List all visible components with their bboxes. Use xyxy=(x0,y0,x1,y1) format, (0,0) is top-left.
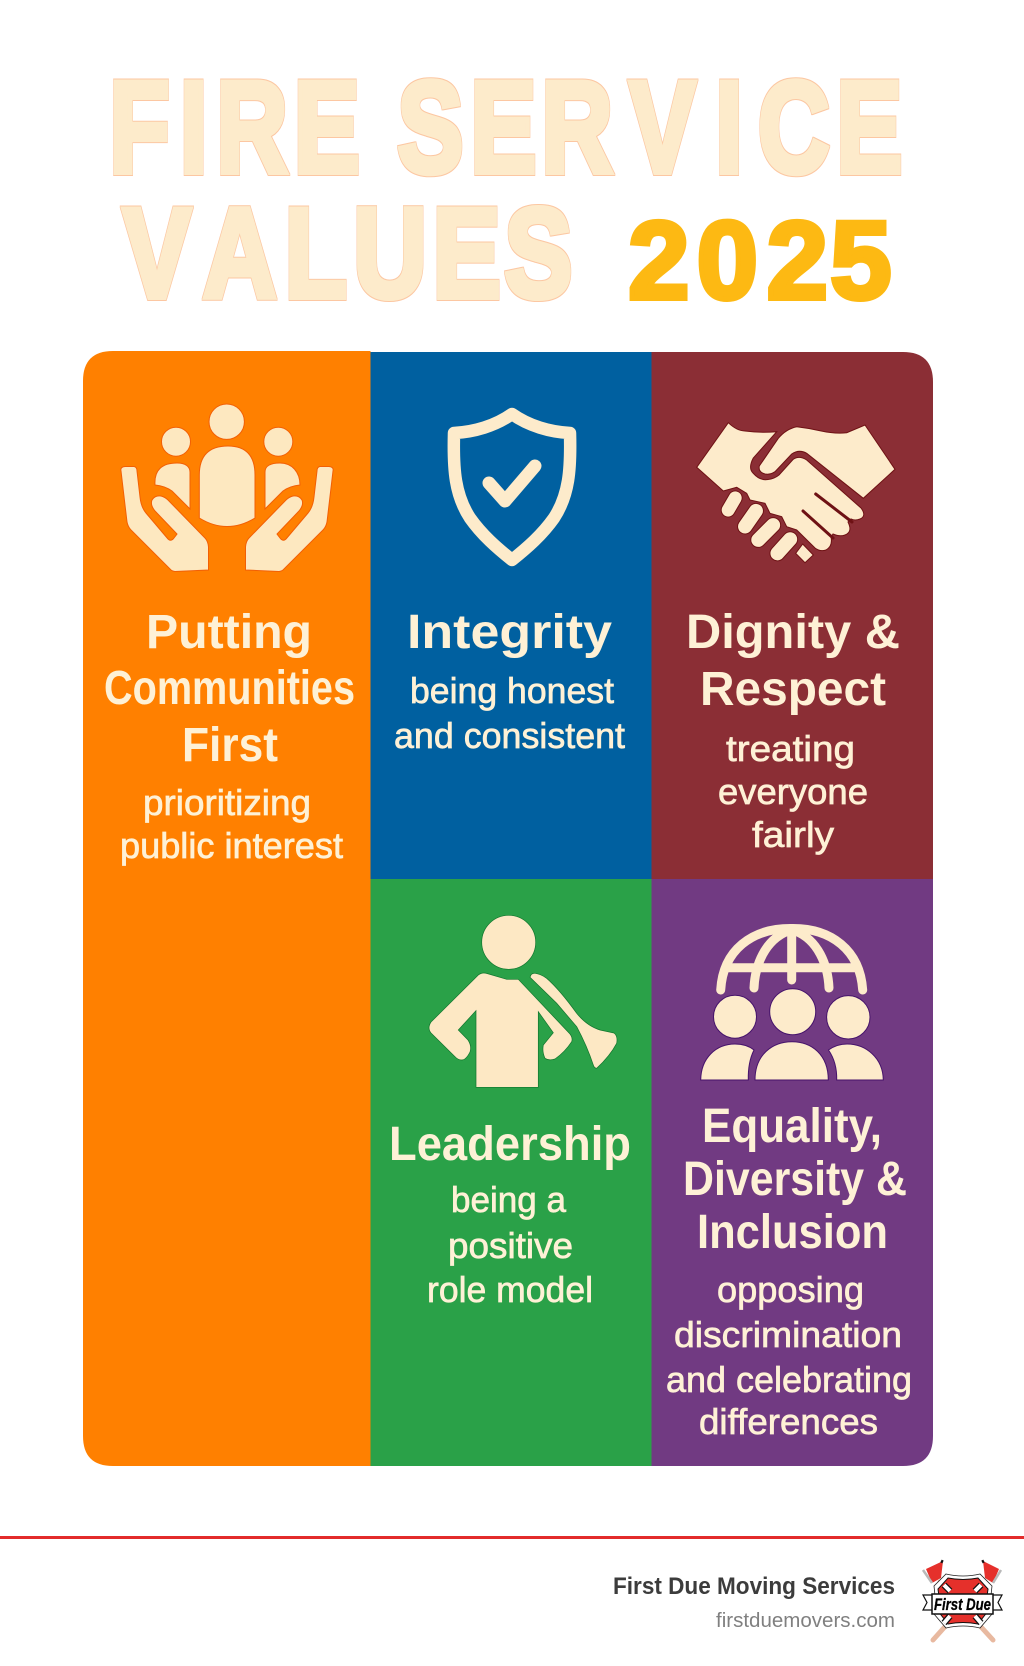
heading: Integrity xyxy=(407,606,612,659)
description xyxy=(394,670,625,756)
description: differences xyxy=(699,1401,878,1442)
description: fairly xyxy=(752,814,834,855)
description: opposing xyxy=(717,1269,864,1310)
title line 2: VALUES xyxy=(123,183,572,325)
panel background xyxy=(370,352,652,879)
footer company name: First Due Moving Services xyxy=(613,1573,895,1600)
icon: company logo: First Due xyxy=(934,1595,991,1614)
icon: leader with horn xyxy=(429,915,617,1087)
heading: Respect xyxy=(700,663,886,716)
panel: putting communities first xyxy=(83,351,370,1466)
description: positive xyxy=(448,1225,573,1266)
icon: shield with check xyxy=(454,414,570,560)
description: being honest xyxy=(410,670,614,711)
heading: Putting xyxy=(146,606,312,659)
icon: company logo xyxy=(923,1561,1002,1640)
panel background xyxy=(370,879,652,1466)
description xyxy=(666,1269,912,1442)
heading: Leadership xyxy=(389,1118,631,1171)
description: discrimination xyxy=(674,1314,902,1355)
heading: First xyxy=(182,719,278,772)
heading: Dignity & xyxy=(686,606,900,659)
description: prioritizing xyxy=(143,782,311,823)
heading: Inclusion xyxy=(697,1206,888,1259)
description: treating xyxy=(726,728,855,769)
footer website: firstduemovers.com xyxy=(716,1609,895,1632)
description: and celebrating xyxy=(666,1359,912,1400)
panel: equality, diversity and inclusion xyxy=(652,879,933,1466)
heading: Equality, xyxy=(702,1100,882,1153)
icon: handshake xyxy=(697,423,895,564)
description: public interest xyxy=(120,825,343,866)
title line 1: FIRE SERVICE xyxy=(109,55,902,200)
panel: dignity and respect xyxy=(652,352,933,879)
panel: integrity xyxy=(370,352,652,879)
footer divider xyxy=(0,1536,1024,1539)
description xyxy=(718,728,868,855)
panel background xyxy=(652,352,933,879)
description: being a xyxy=(451,1179,567,1220)
icon: globe over people xyxy=(701,928,883,1080)
panel background xyxy=(83,351,370,1466)
year: 2025 xyxy=(628,200,891,322)
heading xyxy=(686,606,900,716)
description: everyone xyxy=(718,771,868,812)
panel: leadership xyxy=(370,879,652,1466)
description: and consistent xyxy=(394,715,625,756)
title xyxy=(109,55,902,325)
description xyxy=(120,782,343,866)
heading: Communities xyxy=(104,662,355,715)
heading: Diversity & xyxy=(683,1153,907,1206)
panel background xyxy=(652,879,933,1466)
heading xyxy=(104,606,355,772)
description xyxy=(427,1179,593,1310)
heading xyxy=(683,1100,907,1259)
icon: hands holding people xyxy=(121,404,333,572)
description: role model xyxy=(427,1269,593,1310)
